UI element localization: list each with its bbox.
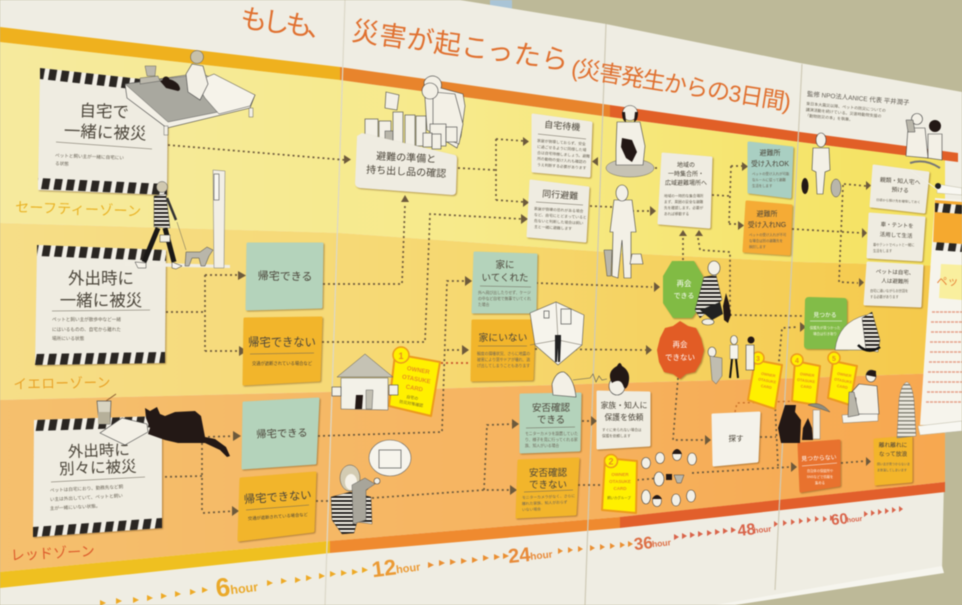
card: shelter accepts: なルールに従って避難 — [752, 177, 786, 182]
bottom stripe orange — [330, 517, 620, 553]
card: leave with relatives: 親類・知人宅へ — [880, 176, 921, 186]
card: pet at home people at shelter: 人は避難所 — [881, 277, 909, 285]
card: shelter refuses: ペットの受け入れが不可 — [749, 232, 787, 237]
panel: yellow zone card: 一緒に被災 — [60, 291, 142, 310]
card: safety confirmed: モニターカメラを設置していた — [525, 431, 578, 436]
card: separated and wandering: なって放浪 — [879, 450, 907, 458]
card: temporary assembly area: 地域の — [677, 161, 695, 169]
card: ask family and friends for protection — [598, 392, 649, 448]
card: can return home yellow zone: 帰宅できる — [258, 270, 313, 283]
top stripe red — [610, 105, 958, 162]
illustration: standing woman with dog and bag — [604, 185, 643, 278]
title: 災害が起こったら — [350, 16, 570, 76]
illustration: bundled woman — [897, 382, 916, 438]
36 hour label: 36 — [633, 533, 654, 554]
card: safety not confirmed: モニターカメラがなく、さらに — [522, 493, 575, 500]
card: stay at home: 自宅待機 — [544, 118, 581, 133]
6 hour label: 6 — [214, 571, 232, 603]
illustration: couple with pets — [906, 114, 942, 168]
badge: not reunited: できない — [665, 353, 695, 362]
card: leave with relatives: 預ける — [891, 185, 909, 195]
card: safety confirmed: 族、知人がいる場合 — [525, 443, 559, 448]
card: evacuate together — [528, 181, 588, 241]
36 hour label: hour — [652, 537, 672, 549]
illustration: two women on the phone — [552, 363, 629, 397]
card: not found: 見つからない — [801, 454, 837, 463]
card: found: 場合は引き取り — [813, 331, 837, 336]
card: evacuation preparation: 避難の準備と — [376, 149, 436, 166]
supervisor credit: 東日本大震災以降、ペットの防災についての — [806, 100, 886, 113]
top stripe amber — [0, 27, 340, 80]
card: temporary assembly area: 一時集合所・ — [668, 170, 704, 178]
owner otasuke card 3: CARD — [760, 384, 772, 390]
card: shelter refuses: 検討します — [749, 244, 767, 249]
owner otasuke card 1 — [389, 347, 440, 416]
owner otasuke card 5 — [828, 352, 857, 405]
owner otasuke card 5: OTASUKE — [834, 377, 853, 385]
card: safety not confirmed: 安否確認 — [529, 467, 567, 479]
supervisor credit: 監修 NPO法人ANICE 代表 平井潤子 — [807, 89, 910, 107]
owner otasuke card 2: CARD — [614, 486, 627, 491]
card: cannot return home red zone: 帰宅できない — [243, 489, 312, 506]
card: pet stayed at home: の中など自宅で無事でいてくれ — [478, 296, 531, 301]
owner otasuke card 4 — [791, 354, 820, 405]
card: temporary assembly area: 広域避難場所へ — [665, 179, 707, 187]
card: pet stayed at home — [473, 253, 536, 312]
card: pet stayed at home: た場合 — [478, 302, 490, 307]
card: safety confirmed: り、様子を見に行ってくれる家 — [525, 437, 578, 442]
window clip on wall — [490, 0, 512, 9]
60 hour label: 60 — [830, 510, 849, 529]
bottom stripe red — [620, 482, 945, 528]
card: cannot return home yellow zone: 帰宅できない — [248, 336, 316, 349]
card: not found: 集める — [815, 480, 825, 485]
card: stay at home — [533, 115, 591, 176]
panel: red zone card — [33, 416, 162, 537]
card: evacuation preparation: 持ち出し品の確認 — [366, 163, 446, 180]
owner otasuke card 1: 自宅の — [406, 393, 419, 401]
card: ask family and friends for protection: 家族・知人に — [601, 400, 647, 410]
card: temporary assembly area — [659, 154, 711, 227]
card: cannot return home yellow zone: 交通が遮断されている場合など — [252, 360, 313, 367]
card: evacuate together: 家屋が倒壊の恐れがある場合 — [534, 206, 584, 214]
card: shelter accepts: 受け入れOK — [751, 159, 789, 168]
panel: yellow zone card: にはいるものの、自宅から離れた — [52, 326, 121, 333]
card: live in car or tent: 活用して生活 — [879, 230, 913, 240]
card: temporary assembly area: 先を確認します。必要が — [664, 205, 704, 210]
card: stay at home: うえ判断する必要があります — [537, 162, 587, 170]
card: pet not at home — [472, 321, 534, 380]
owner otasuke card 5: CARD — [836, 384, 848, 390]
supervisor credit: 講演活動を続けている。災害時動物支援の — [806, 106, 882, 119]
owner otasuke card 4: OTASUKE — [797, 378, 816, 384]
heading: yellow zone: イエローゾーン — [13, 375, 111, 392]
panel: red zone card: 主が一緒にいない状態。 — [50, 502, 101, 512]
card: cannot return home red zone: 交通が遮断されている場合など — [248, 511, 309, 522]
card: safety not confirmed: できない — [529, 480, 567, 491]
heading: safety zone: セーフティーゾーン — [15, 199, 141, 219]
owner otasuke card 2: OWNER — [611, 472, 629, 477]
poster seam middle — [585, 24, 606, 605]
card: can return home red zone — [243, 399, 318, 468]
card: pet stayed at home: 家に — [495, 259, 515, 271]
card: separated and wandering — [875, 437, 911, 484]
owner otasuke card 5: 5 — [832, 356, 836, 363]
card: separated and wandering: ま放浪してしまいます — [877, 467, 907, 472]
owner otasuke card 4: OWNER — [800, 372, 815, 378]
owner otasuke card 1: 1 — [398, 351, 404, 361]
card: temporary assembly area: 地域の一時的な集合場所 — [664, 193, 704, 198]
12 hour label: hour — [395, 561, 422, 576]
badge: reunited: できる — [674, 292, 694, 300]
owner otasuke card 3: OWNER — [761, 372, 776, 378]
illustration: police officer with dog and person under umbrella — [778, 404, 830, 443]
panel: red zone card: 別々に被災 — [59, 458, 137, 478]
adjacent poster on right — [910, 170, 962, 435]
card: pet not at home: 家にいない — [479, 331, 527, 344]
card: live in car or tent: 生活をします — [873, 248, 892, 253]
owner otasuke card 1: CARD — [405, 385, 424, 394]
card: pet stayed at home: いてくれた — [482, 273, 528, 284]
48 hour label: hour — [753, 525, 772, 535]
owner otasuke card 2: OTASUKE — [609, 479, 631, 484]
illustration: glass and magazine — [97, 394, 148, 445]
card: evacuate together: など、自宅にとどまっていると — [534, 212, 587, 220]
card: pet not at home: 被害により窓やドアが壊れ、逃 — [477, 357, 530, 362]
card: found — [804, 297, 847, 349]
card: separated and wandering: 飼い主が見つからないま — [877, 461, 910, 466]
card: pet at home people at shelter: 自宅に通いながらお世話を — [870, 288, 908, 293]
panel: red zone card: 外出時に — [68, 441, 130, 461]
bottom stripe amber — [0, 541, 330, 588]
panel: red zone card: ペットは自宅におり、勤務先など飼 — [50, 483, 124, 494]
card: stay at home: に過ごせるように同様した場 — [537, 144, 587, 152]
card: not found — [799, 441, 839, 491]
card: live in car or tent: 車やテントでペットと一緒に — [873, 242, 914, 247]
card: safety not confirmed — [517, 459, 578, 517]
card: shelter refuses: 避難所 — [756, 209, 778, 218]
orange red zone band — [0, 373, 945, 572]
card: live in car or tent — [868, 214, 924, 260]
card: shelter refuses: な場合は別の避難先を — [749, 238, 783, 243]
illustration: black cat — [145, 407, 230, 457]
illustration: house with pets — [332, 354, 398, 410]
card: can return home red zone: 帰宅できる — [256, 426, 308, 441]
card: shelter accepts: ペットの受け入れが可能 — [752, 171, 790, 176]
48 hour label — [737, 520, 772, 540]
card: stay at home: 所の動物の受け入れも確認の — [537, 156, 587, 164]
card: evacuate together: 危ないと判断した場合は飼い — [534, 218, 584, 226]
card: temporary assembly area: あれば移動する — [664, 211, 690, 216]
6 hour label: hour — [230, 580, 259, 597]
owner otasuke card 2: 飼いカグループ — [607, 495, 631, 500]
card: safety not confirmed: いない場合 — [522, 506, 541, 512]
illustration: person under blanket — [835, 312, 880, 352]
card: not found: SNSなどで情報を — [807, 474, 833, 479]
24 hour label: hour — [530, 550, 553, 563]
panel: red zone card: い主は外出していて、ペットと飼い — [50, 492, 123, 503]
owner otasuke card 4: CARD — [800, 384, 812, 390]
badge: not reunited: 再会 — [672, 339, 688, 349]
card: search — [713, 413, 759, 465]
36 hour label — [633, 531, 672, 554]
card: evacuation preparation — [355, 133, 457, 195]
panel: safety zone card: ペットと飼い主が一緒に自宅にい — [55, 152, 124, 161]
title: もしも、 — [239, 3, 336, 45]
card: stay at home: 家屋が倒壊しておらず、安全 — [537, 138, 586, 146]
card: pet not at home: 輸度の損壊状況、さらに地震の — [477, 351, 530, 356]
card: pet at home people at shelter: する必要があります — [870, 294, 899, 299]
card: can return home yellow zone — [247, 244, 322, 309]
illustration: room with person — [530, 302, 584, 365]
12 hour label: 12 — [370, 554, 398, 582]
6 hour label — [214, 568, 259, 603]
card: shelter accepts — [749, 143, 792, 197]
badge: not reunited — [657, 321, 704, 379]
illustration: vet with pet — [842, 370, 879, 423]
heading: red zone: レッドゾーン — [10, 543, 95, 563]
24 hour label: 24 — [507, 544, 532, 568]
card: found: 見つかる — [813, 312, 837, 319]
card: evacuate together: 同行避難 — [542, 188, 579, 201]
card: separated and wandering: 離れ離れに — [879, 441, 908, 449]
title — [239, 3, 793, 115]
owner otasuke card 2 — [602, 454, 637, 513]
card: cannot return home yellow zone — [244, 318, 321, 384]
owner otasuke card 5: OWNER — [837, 372, 852, 378]
card: pet at home people at shelter: ペットは自宅、 — [876, 267, 914, 277]
card: pet stayed at home: 外へ飛び出したりせず、ケージ — [478, 290, 531, 295]
poster seam right — [775, 64, 802, 590]
panel: safety zone card — [38, 68, 168, 195]
owner otasuke card 4: 4 — [795, 358, 799, 365]
time axis — [100, 506, 903, 605]
panel: safety zone card: る状態 — [55, 160, 69, 166]
owner otasuke card 3: OTASUKE — [758, 377, 777, 385]
yellow safety zone band — [0, 42, 945, 266]
card: pet at home people at shelter — [865, 263, 922, 306]
illustration: woman with two cats — [802, 133, 841, 197]
flow lines — [160, 137, 871, 516]
illustration: crowd asking about missing pet — [708, 336, 754, 384]
owner otasuke card 2: 2 — [608, 456, 614, 466]
60 hour label — [830, 509, 863, 529]
bottom roll bar — [715, 566, 944, 605]
card: shelter refuses: 受け入れNG — [748, 220, 786, 229]
illustration: heads network around pets — [642, 449, 696, 506]
panel: yellow zone card — [35, 245, 166, 365]
owner otasuke card 1: OWNER — [406, 366, 431, 376]
48 hour label: 48 — [737, 521, 756, 540]
60 hour label: hour — [847, 516, 863, 524]
illustration: sitting woman with black cat — [606, 106, 654, 177]
panel: yellow zone card: 外出時に — [68, 269, 134, 288]
card: ask family and friends for protection: 保護を依頼 — [605, 412, 644, 422]
card: safety confirmed — [521, 394, 580, 452]
illustration: woman walking dog — [125, 170, 230, 269]
illustration: bed with woman and cats — [125, 50, 255, 135]
card: safety not confirmed: 離れた家族、知人がおらず — [522, 499, 568, 506]
panel: yellow zone card: ペットと飼い主が散歩中など一緒 — [52, 316, 121, 323]
owner otasuke card 1: 防災対策確認 — [399, 398, 424, 408]
panel: yellow zone card: 場所にいる状態 — [52, 335, 85, 342]
card: ask family and friends for protection: 保護を依頼します — [602, 433, 631, 438]
card: search: 探す — [728, 433, 744, 443]
panel: safety zone card: 自宅で — [79, 101, 129, 122]
top stripe orange — [340, 67, 610, 117]
card: pet not at home: げ出してしまうこともあります — [477, 363, 530, 368]
illustration: crouching person with black cat — [695, 261, 731, 325]
illustration: evacuation supplies and person — [365, 76, 465, 149]
card: temporary assembly area: まず、周囲の安全な避難 — [664, 199, 704, 204]
card: shelter accepts: 生活をします — [752, 183, 773, 188]
card: ask family and friends for protection: すぐに来られない場合は — [602, 427, 642, 432]
badge: reunited — [663, 261, 703, 318]
card: live in car or tent: 車・テントを — [880, 220, 914, 230]
card: shelter refuses — [744, 202, 791, 254]
supervisor credit: 「動物防災の本」を執筆。 — [805, 112, 853, 122]
owner otasuke card 3 — [748, 352, 782, 409]
12 hour label — [370, 551, 422, 582]
card: shelter accepts: 避難所 — [760, 148, 780, 157]
card: safety confirmed: 安否確認 — [532, 402, 570, 414]
panel: safety zone card: 一緒に被災 — [64, 122, 147, 143]
light orange yellow zone band — [0, 223, 945, 400]
24 hour label — [507, 542, 554, 568]
supervisor credit — [805, 89, 910, 127]
card: leave with relatives: 日頃から預け先を確保しておく — [876, 197, 921, 204]
card: found: 保護先が見つかった — [810, 325, 841, 330]
owner otasuke card 1: OTASUKE — [401, 375, 431, 385]
card: stay at home: 合は自宅待機しましょう。避難 — [537, 150, 590, 159]
owner otasuke card 3: 3 — [756, 356, 760, 363]
card: safety confirmed: できる — [537, 415, 565, 426]
illustration: woman holding dog with thought bubble — [331, 440, 411, 534]
badge: reunited: 再会 — [676, 278, 692, 288]
title: (災害発生からの3日間) — [570, 55, 793, 115]
poster seam left — [325, 0, 345, 605]
card: not found: 自治体の保健所や — [807, 468, 833, 473]
card: cannot return home red zone — [239, 473, 315, 540]
card: leave with relatives — [871, 166, 928, 212]
card: evacuate together: 主と一緒に避難します — [534, 224, 572, 231]
